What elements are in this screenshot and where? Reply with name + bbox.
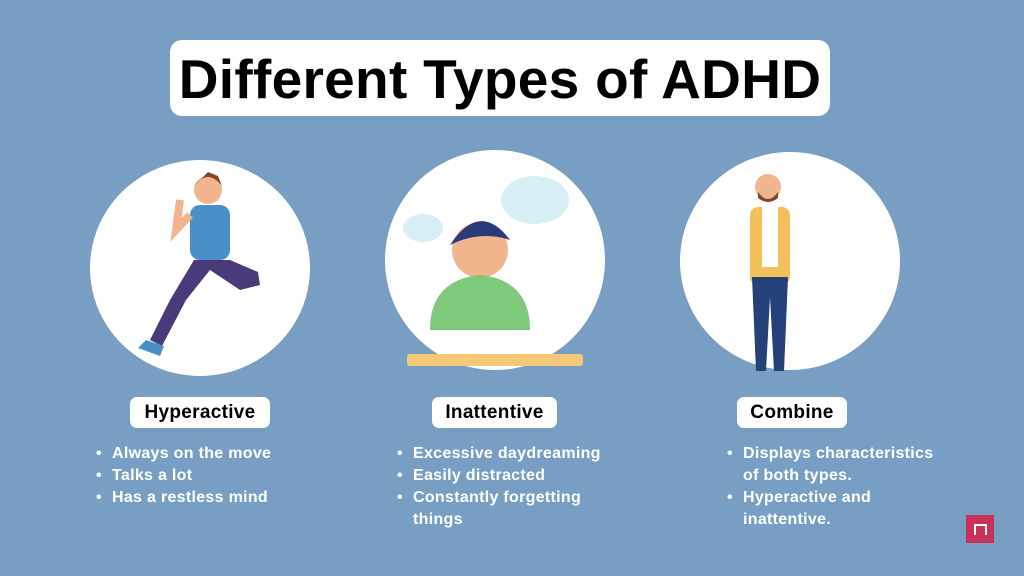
text: combine list: Hyperactive and: [743, 489, 871, 506]
icon: running boy: [138, 172, 260, 356]
text: inattentive list: Easily distracted: [413, 467, 545, 484]
icon: standing man: [750, 174, 790, 371]
heading: inattentive: Inattentive: [445, 402, 544, 423]
panel: inattentive illustration: [385, 150, 605, 370]
heading: hyperactive: Hyperactive: [144, 402, 256, 423]
heading: combine: Combine: [750, 402, 834, 423]
heading: hyperactive: [130, 397, 270, 428]
text: inattentive list: Constantly forgetting: [413, 489, 581, 506]
text: hyperactive list: Always on the move: [112, 445, 271, 462]
icon: thinking boy: [403, 176, 583, 366]
heading: combine: [737, 397, 847, 428]
icon: logo: [966, 515, 994, 543]
text: combine list: [728, 445, 933, 528]
title: Different Types of ADHD: [179, 48, 821, 110]
text: inattentive list: things: [413, 511, 463, 528]
panel: hyperactive illustration: [90, 160, 310, 376]
text: inattentive list: Excessive daydreaming: [413, 445, 601, 462]
panel: combine illustration: [680, 152, 900, 370]
text: combine list: of both types.: [743, 467, 852, 484]
heading: inattentive: [432, 397, 557, 428]
text: combine list: inattentive.: [743, 511, 831, 528]
text: combine list: Displays characteristics: [743, 445, 933, 462]
text: hyperactive list: Has a restless mind: [112, 489, 268, 506]
text: hyperactive list: Talks a lot: [112, 467, 192, 484]
text: hyperactive list: [96, 445, 271, 506]
text: inattentive list: [398, 445, 601, 528]
